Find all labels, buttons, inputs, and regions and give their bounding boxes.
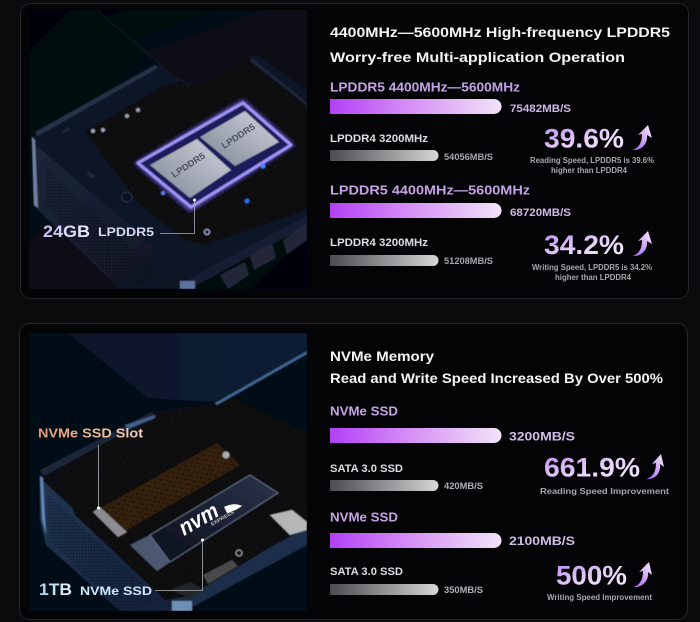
bar: NVMe read [330, 428, 502, 443]
value: 75482MB/S: 75482MB/S [510, 103, 571, 115]
caption: reading [530, 156, 654, 175]
heading: 4400MHz—5600MHz High-frequency LPDDR5 [330, 24, 670, 40]
value: 68720MB/S: 68720MB/S [510, 207, 571, 219]
stat: 34.2%: 34.2% [544, 230, 624, 260]
leader line: slot [98, 445, 99, 507]
label: LPDDR4 write: LPDDR4 3200MHz [330, 237, 429, 249]
icon: up arrow [632, 125, 652, 150]
caption: writing improvement: Writing Speed Improvement [547, 593, 652, 602]
heading [330, 24, 670, 65]
panel: NVMe memory [20, 324, 688, 620]
bar: LPDDR4 read [330, 150, 438, 161]
NVMe writing speed comparison [330, 510, 652, 602]
chip label left: LPDDR5 [170, 151, 207, 180]
panel: LPDDR5 memory [20, 4, 688, 298]
bar: LPDDR4 write [330, 255, 438, 266]
value: 3200MB/S: 3200MB/S [509, 430, 575, 444]
value: 54056MB/S: 54056MB/S [444, 152, 493, 162]
icon: up arrow [633, 562, 652, 587]
reading speed comparison [330, 80, 654, 175]
label: SATA read: SATA 3.0 SSD [330, 463, 403, 475]
SSD logo subtext: EXPRESS [210, 509, 236, 528]
callout: 1TB NVMe SSD: 1TB [39, 580, 72, 599]
image: mini PC with NVMe SSD [29, 333, 307, 611]
label: NVMe read: NVMe SSD [330, 404, 398, 418]
label: LPDDR4 read: LPDDR4 3200MHz [330, 133, 429, 145]
callout: 24GB LPDDR5: 24GB [43, 222, 90, 241]
bar: LPDDR5 write [330, 203, 502, 218]
value: 51208MB/S: 51208MB/S [444, 256, 493, 266]
leader line [160, 200, 194, 234]
caption: writing: higher than LPDDR4 [555, 273, 632, 282]
value: 350MB/S: 350MB/S [444, 585, 483, 595]
bar: SATA read [330, 480, 438, 491]
value: 2100MB/S: 2100MB/S [509, 534, 575, 548]
leader line: SSD [155, 540, 202, 590]
callout: 24GB LPDDR5: LPDDR5 [98, 225, 154, 239]
stat: 661.9%: 661.9% [544, 452, 640, 482]
icon: up arrow [646, 454, 664, 479]
caption: reading: Reading Speed, LPDDR5 is 39.6% [530, 156, 654, 165]
label: LPDDR5 write: LPDDR5 4400MHz—5600MHz [330, 182, 531, 198]
callout: 1TB NVMe SSD [39, 580, 152, 599]
stat: 500%: 500% [556, 560, 627, 590]
NVMe reading speed comparison [330, 404, 669, 496]
caption: reading improvement: Reading Speed Improvement [540, 487, 669, 496]
caption: reading: higher than LPDDR4 [551, 166, 628, 175]
icon: up arrow [632, 231, 652, 256]
heading: Worry-free Multi-application Operation [330, 49, 625, 65]
caption: writing: Writing Speed, LPDDR5 is 34.2% [532, 263, 652, 272]
logo swoosh [224, 504, 242, 513]
callout: 1TB NVMe SSD: NVMe SSD [80, 584, 152, 598]
heading: Read and Write Speed Increased By Over 500% [330, 370, 664, 386]
caption: writing [532, 263, 652, 282]
callout: 24GB LPDDR5 [43, 222, 154, 241]
chip label right: LPDDR5 [220, 122, 257, 151]
bar: SATA write [330, 584, 438, 595]
writing speed comparison [330, 182, 652, 282]
callout: NVMe SSD Slot: NVMe SSD Slot [38, 426, 144, 440]
stat: 39.6%: 39.6% [544, 124, 624, 154]
bar: NVMe write [330, 533, 502, 548]
heading [330, 348, 664, 386]
image: mini PC with LPDDR5 chips [29, 10, 307, 289]
label: LPDDR5 read: LPDDR5 4400MHz—5600MHz [330, 80, 521, 94]
label: SATA write: SATA 3.0 SSD [330, 566, 403, 578]
label: NVMe write: NVMe SSD [330, 510, 398, 524]
bar: LPDDR5 read [330, 99, 502, 114]
SSD logo: nvm [174, 498, 223, 540]
value: 420MB/S: 420MB/S [444, 481, 483, 491]
heading: NVMe Memory [330, 348, 434, 364]
